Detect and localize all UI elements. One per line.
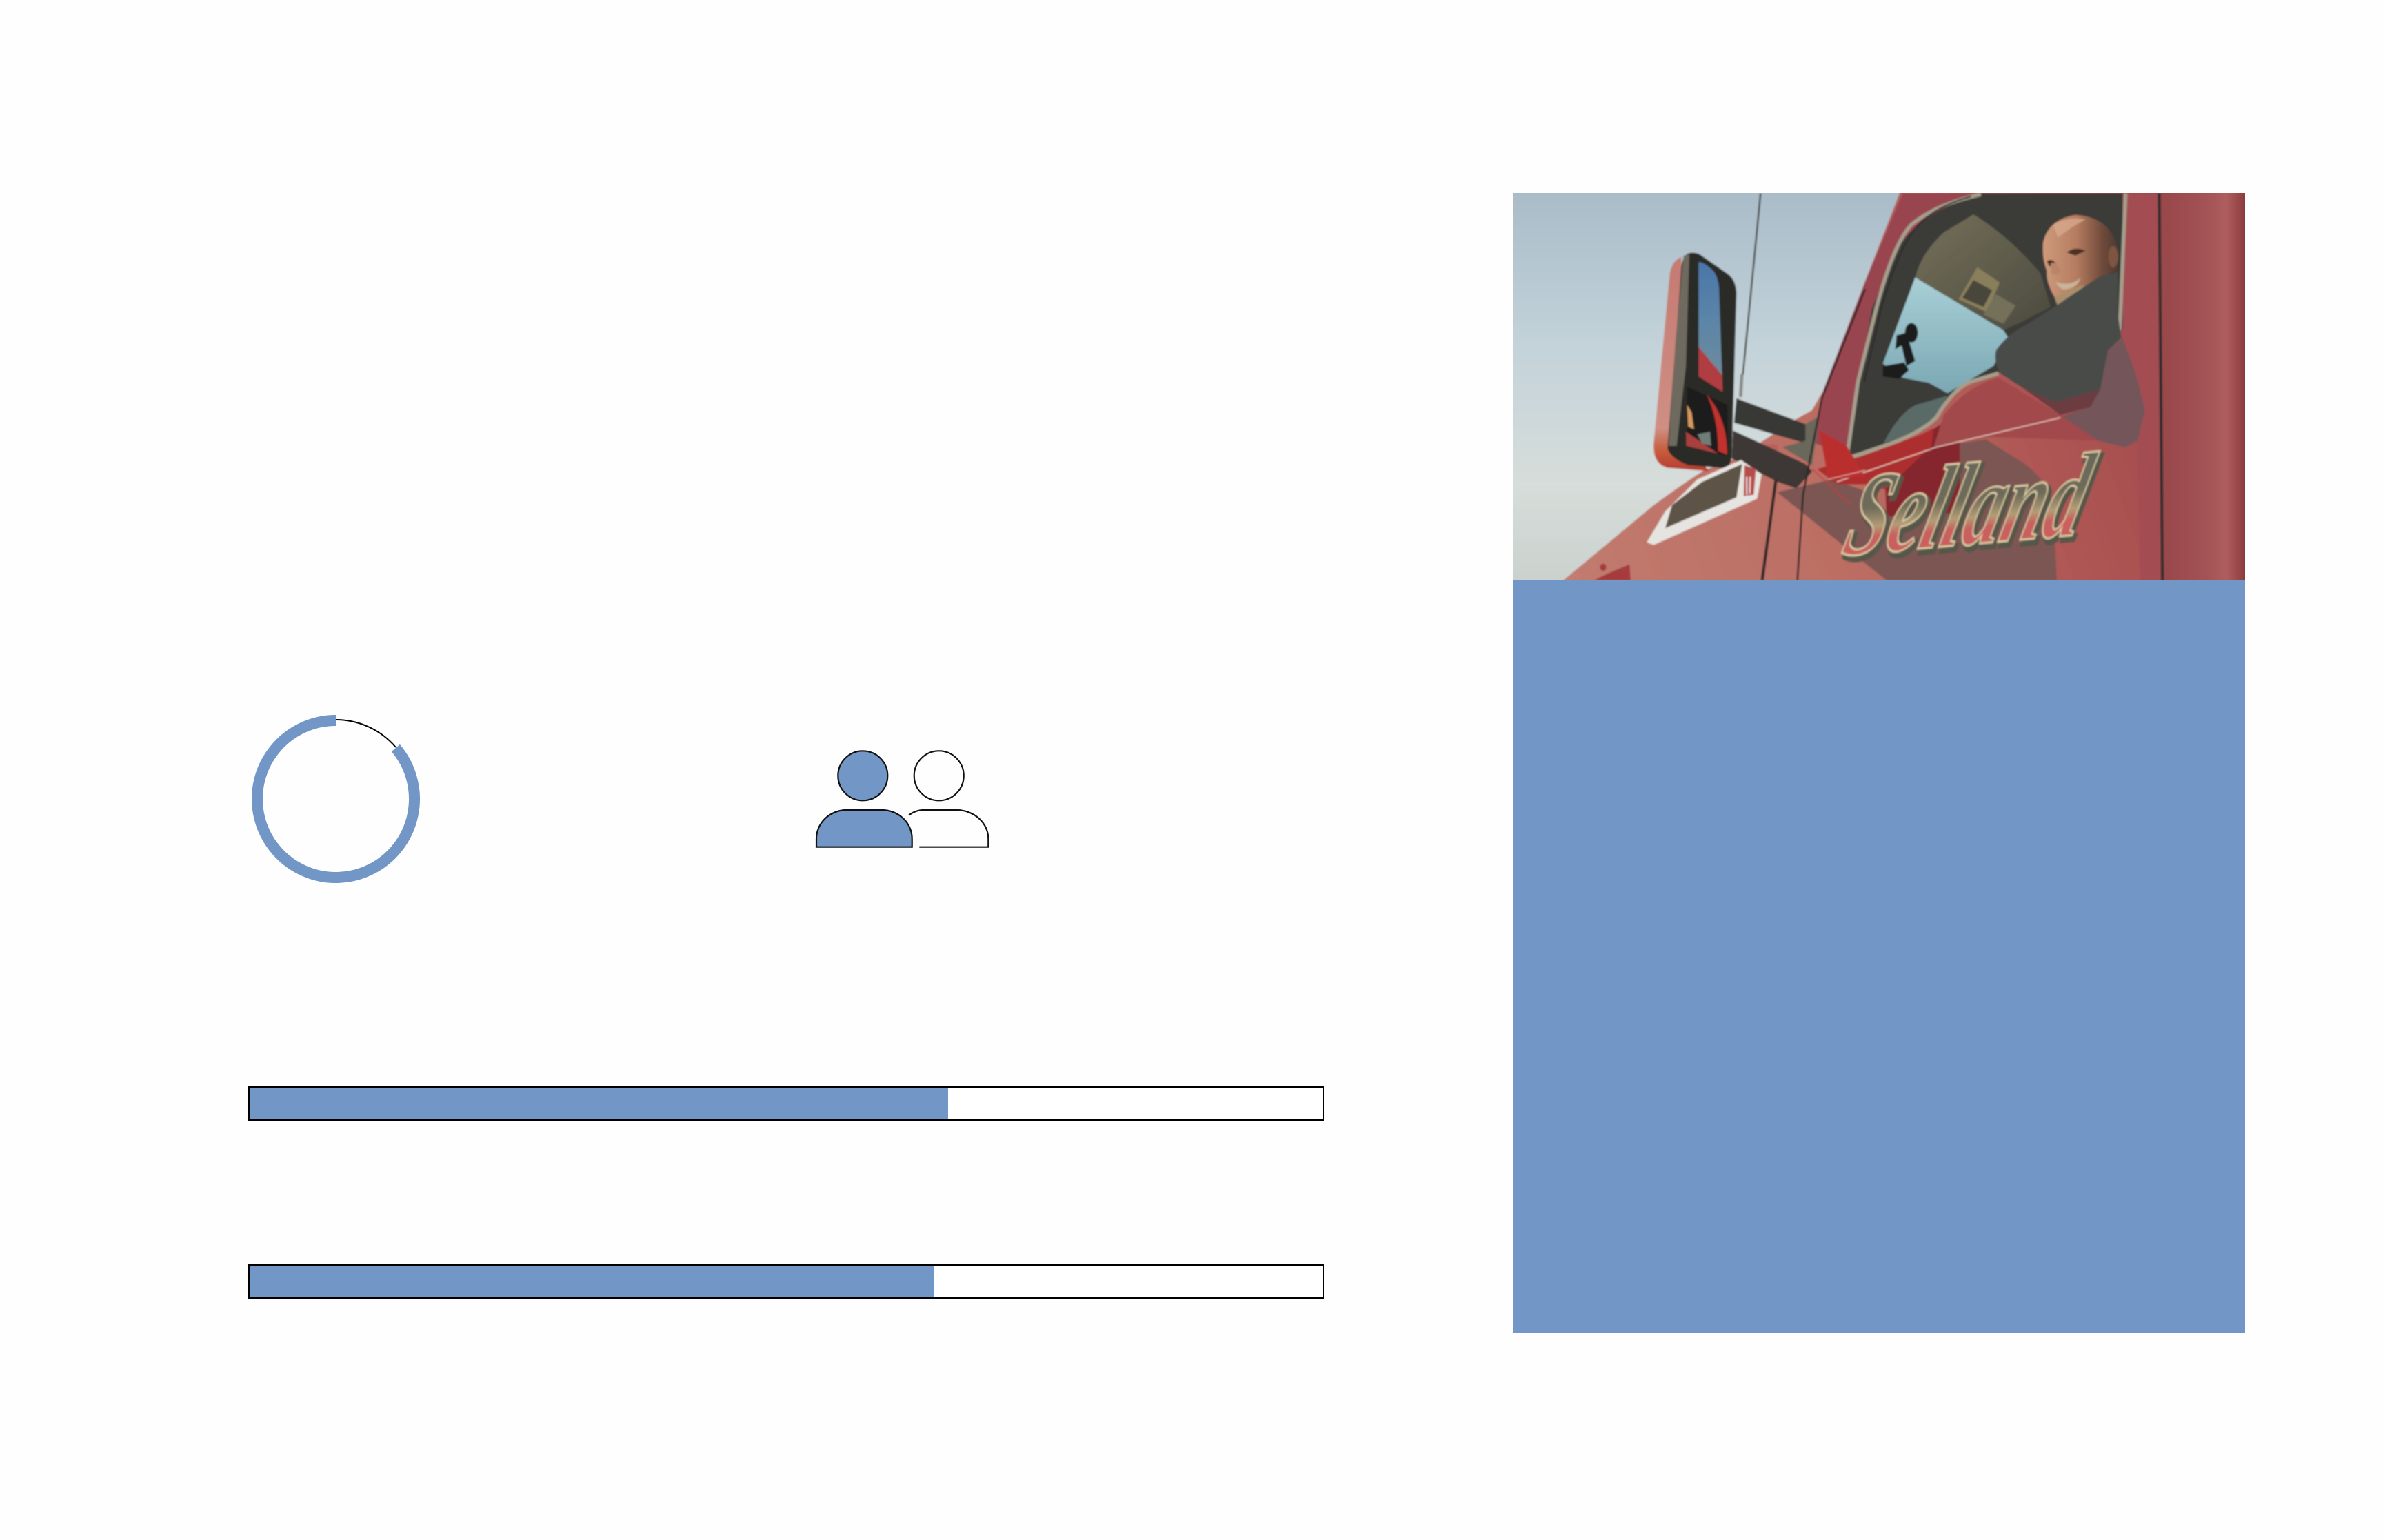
mirror arms bbox=[1733, 398, 1807, 443]
panel: blue text panel bbox=[1513, 580, 2245, 1333]
front door seams bbox=[1762, 479, 1776, 580]
cast shadows on door bbox=[2062, 338, 2145, 447]
panel: photo of truck driver bbox=[1506, 186, 2252, 587]
bright red fender reflection bbox=[1819, 430, 1865, 479]
driver shirt bbox=[1995, 272, 2122, 412]
antenna bbox=[1743, 193, 1760, 375]
door lettering bbox=[1840, 449, 2106, 563]
door lettering: Selland bbox=[1835, 432, 2109, 586]
infographic canvas bbox=[248, 193, 2245, 1333]
ring chart bbox=[257, 720, 414, 878]
bar chart: first progress bar bbox=[249, 1087, 1323, 1120]
emblem bbox=[1744, 465, 1756, 496]
hood marker bbox=[1594, 564, 1631, 580]
driver head bbox=[2043, 215, 2118, 307]
truck cab body bbox=[1562, 193, 2161, 580]
icon: two people bbox=[816, 751, 988, 847]
rear cab column bbox=[2161, 193, 2245, 580]
door lettering: Selland bbox=[1833, 428, 2107, 582]
mirror frame bbox=[1667, 253, 1736, 468]
dash camera mount bbox=[1883, 323, 1918, 379]
cab window and driver bbox=[1777, 193, 2162, 580]
window trim bbox=[1847, 193, 2126, 458]
vent bbox=[1647, 460, 1762, 545]
mirror glass upper bbox=[1698, 262, 1722, 376]
side mirror and cab front bbox=[1594, 193, 1865, 580]
bar chart: second progress bar bbox=[249, 1265, 1323, 1298]
mirror glass lower bbox=[1687, 387, 1729, 456]
door seam bbox=[2159, 193, 2162, 580]
mirror housing back bbox=[1653, 257, 1709, 471]
